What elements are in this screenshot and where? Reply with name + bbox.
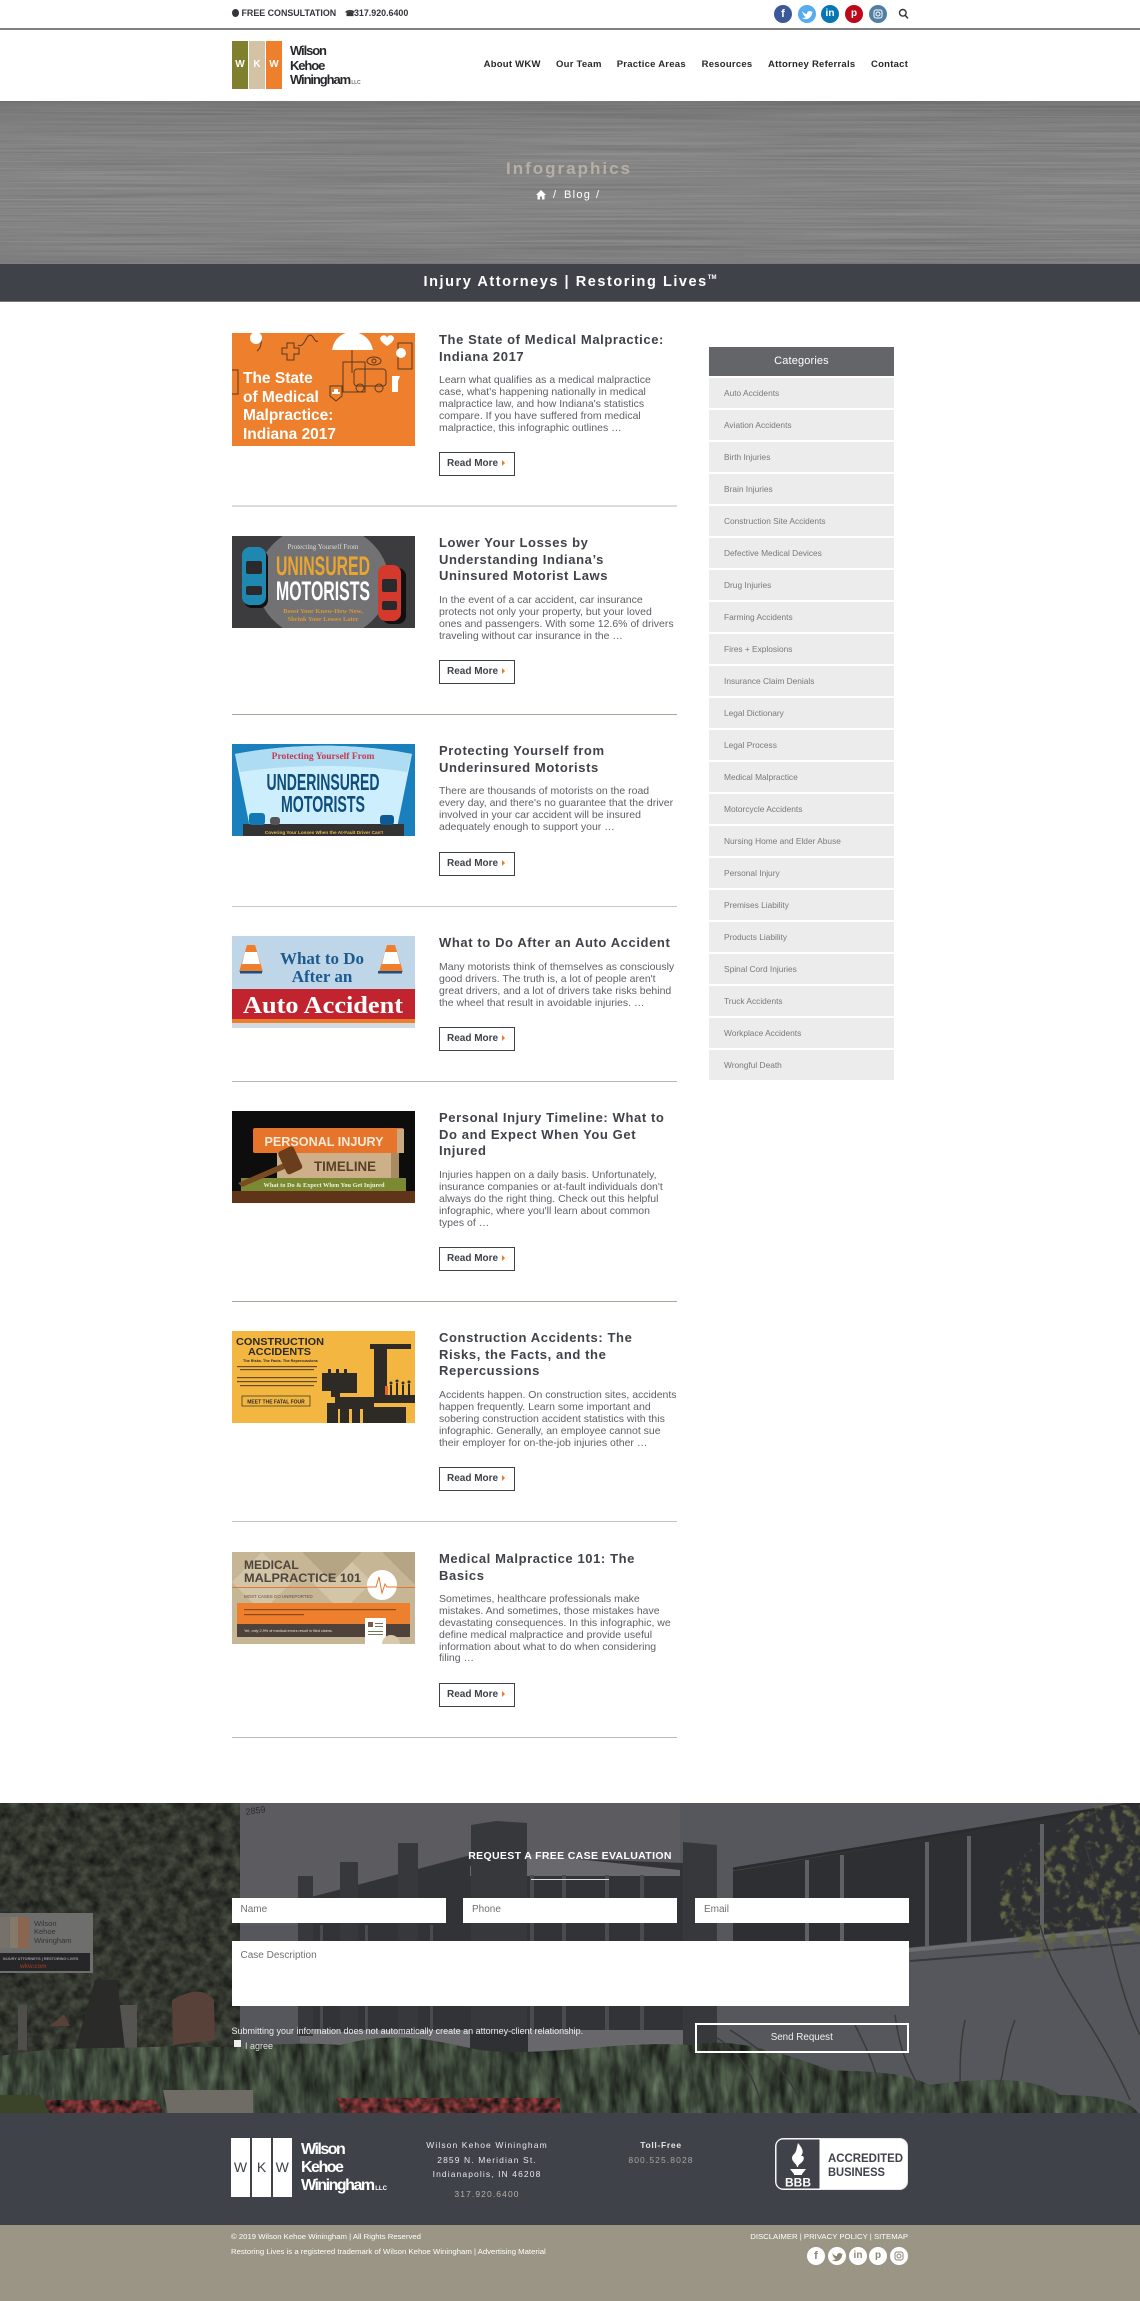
logo bar olive [232,41,248,89]
wall [0,1803,1140,2114]
article title: Uninsured Motorist Laws [439,568,608,583]
article excerpt: the wheel that result in avoidable injuries. … [439,997,644,1009]
article title [439,332,664,364]
social: instagram [869,5,887,23]
article title: Repercussions [439,1363,540,1378]
sidebar: categories [709,347,894,1080]
sidebar: categories: Birth Injuries [724,452,770,462]
social: linkedin: in [826,8,834,19]
article excerpt: types of … [439,1216,489,1228]
breadcrumb: / [553,189,557,201]
article excerpt: infographic. Generally, an employee cannot sue [439,1425,661,1437]
thumbnail: underinsured motorists: Protecting Yourself From [272,752,374,762]
read more button [439,1027,515,1051]
phone number: ☎ [345,9,355,18]
article 5 [232,1110,664,1271]
thumbnail: uninsured motorists [232,536,415,628]
roadside sign [0,1913,93,1973]
roadside sign: Kehoe [34,1927,56,1936]
footer legal bar [0,2225,1140,2301]
sidebar: categories: Wrongful Death [724,1060,782,1070]
breadcrumb: Blog [564,189,591,201]
article excerpt: malpractice law, and how Indiana's statistics [439,398,644,410]
nav links: Attorney Referrals [768,59,855,70]
thumbnail: what to do after an auto accident [232,936,415,1028]
article excerpt: their employer for on-the-job injuries other … [439,1436,647,1448]
form field: name: Name [240,1904,267,1915]
sidebar: categories: Insurance Claim Denials [724,676,814,686]
read more button [439,452,515,476]
read more button: Read More [447,1033,498,1044]
hero banner [0,101,1140,264]
logo bar olive: W [235,59,245,70]
shrubs [0,2037,1140,2120]
social: twitter [798,5,816,23]
thumbnail: construction accidents: CONSTRUCTION [236,1337,324,1348]
article title: Indiana 2017 [439,349,524,364]
read more button: Read More [447,666,498,677]
thumbnail: uninsured motorists: Shrink Your Losses Later [288,616,359,623]
lower left backdrop [172,1992,215,2045]
footer social icons: in [854,2250,862,2261]
article excerpt: infographic, where you'll learn about common [439,1205,650,1217]
top utility bar [0,0,1140,30]
logo bar orange: W [269,59,279,70]
social: linkedin [821,5,839,23]
footer social icons: p [875,2250,881,2261]
article 6 [232,1330,677,1491]
thumbnail: state of medical malpractice: of Medical [243,389,319,406]
article excerpt: protects not only your property, but your loved [439,606,652,618]
thumbnail: construction accidents [232,1331,415,1423]
breadcrumb: / [596,189,600,201]
article 7 [232,1551,671,1707]
sidebar: categories: Motorcycle Accidents [724,804,802,814]
article excerpt [439,1389,677,1448]
read more button [439,1467,515,1491]
read more button [439,852,515,876]
sidebar: categories: Truck Accidents [724,996,783,1006]
thumbnail: what to do after an auto accident: What to Do [280,949,364,968]
thumbnail: underinsured motorists [232,744,415,836]
social: facebook: f [781,8,785,20]
article excerpt: In the event of a car accident, car insurance [439,594,643,606]
categories heading [709,347,894,376]
right tree [997,1805,1140,1960]
nav links [484,59,908,70]
article excerpt: Many motorists think of themselves as consciously [439,961,674,973]
form field: case description [232,1941,908,2006]
article excerpt: Accidents happen. On construction sites, accidents [439,1389,677,1401]
BBB accredited badge: ACCREDITED [828,2153,903,2165]
logo wordmark [301,2141,387,2198]
nav links: Our Team [556,59,602,70]
article excerpt: case, what's happening nationally in medical [439,386,646,398]
article excerpt: Sometimes, healthcare professionals make [439,1593,640,1605]
read more button [439,660,515,684]
thumbnail: state of medical malpractice: Indiana 2017 [243,426,336,443]
form field: phone [463,1898,677,1923]
footer contact panel [0,2114,1140,2225]
address block: Indianapolis, IN 46208 [433,2169,541,2179]
form field: name [232,1898,446,1923]
phone number: 317.920.6400 [354,8,408,18]
thumbnail: personal injury timeline: What to Do & Expect When You Get Injured [264,1182,385,1189]
article title [439,1330,632,1378]
form field: email [695,1898,908,1923]
logo bars [231,2138,293,2197]
article excerpt [439,594,674,642]
logo bar orange [266,41,282,89]
article 1 [232,332,664,476]
tree foliage [0,1803,240,2060]
sidebar: categories: Medical Malpractice [724,772,798,782]
thumbnail: personal injury timeline [232,1111,415,1203]
thumbnail: personal injury timeline: PERSONAL INJURY [264,1134,384,1149]
thumbnail: medical malpractice 101: MOST CASES GO UNREPORTED [244,1594,313,1599]
central glazing [300,1855,683,2038]
thumbnail: what to do after an auto accident: Auto Accident [243,993,403,1019]
article excerpt: information about what to do when considering [439,1640,656,1652]
article excerpt: Learn what qualifies as a medical malpractice [439,374,651,386]
sidebar: categories: Products Liability [724,932,787,942]
article excerpt: every day, and there's no guarantee that the driver [439,797,673,809]
copyright: © 2019 Wilson Kehoe Winingham | All Rights Reserved [231,2232,421,2241]
article title: Basics [439,1568,485,1583]
logo wordmark: Winingham LLC [301,2177,387,2194]
article excerpt: compare. If you have suffered from medical [439,410,641,422]
toll-free block: 800.525.8028 [628,2155,694,2165]
upper wall [240,1803,680,1925]
article excerpt: mistakes. And sometimes, those mistakes have [439,1605,660,1617]
logo wordmark [290,43,361,87]
thumbnail: what to do after an auto accident: After an [292,967,353,986]
read more button [439,1683,515,1707]
sidebar: categories: Premises Liability [724,900,789,910]
nav links: Resources [702,59,752,70]
thumbnail: uninsured motorists: Boost Your Know-How Now, [283,608,363,615]
article excerpt: There are thousands of motorists on the road [439,785,649,797]
sidebar: categories: Construction Site Accidents [724,516,826,526]
breadcrumb [536,189,600,201]
brushed metal texture [0,101,1140,264]
send request button [695,2023,908,2053]
thumbnail: underinsured motorists: Covering Your Losses When the At-Fault Driver Can't [265,830,384,835]
disclaimer: Submitting your information does not automatically create an attorney-client relationship. [232,2026,583,2036]
right window band [733,1803,1140,1965]
address block [400,2138,574,2200]
article title [439,1551,635,1583]
case evaluation section [0,1803,1140,2114]
thumbnail: construction accidents: MEET THE FATAL FOUR [247,1400,305,1406]
article excerpt [439,961,674,1009]
legal links: DISCLAIMER | PRIVACY POLICY | SITEMAP [750,2232,908,2241]
roadside sign: Wilson [34,1919,57,1928]
address block: 2859 N. Meridian St. [437,2155,537,2165]
thumbnail: medical malpractice 101: MEDICAL [244,1558,299,1572]
read more button [439,1247,515,1271]
thumbnail: state of medical malpractice [232,333,415,446]
form field: email: Email [704,1904,729,1915]
logo bar tan: K [253,59,261,70]
article excerpt: involved in your car accident will be insured [439,809,641,821]
thumbnail: uninsured motorists: Protecting Yourself From [288,543,359,551]
article excerpt [439,374,651,434]
logo bar tan [249,41,265,89]
article 3 [232,743,673,876]
article excerpt: ones and passengers. With some 12.6% of drivers [439,618,674,630]
article excerpt: malpractice, this infographic outlines … [439,422,622,434]
BBB accredited badge: BBB [785,2178,811,2190]
sidebar: categories: Farming Accidents [724,612,793,622]
read more button: Read More [447,1253,498,1264]
article title [439,535,608,583]
sidebar: categories: Personal Injury [724,868,780,878]
logo wordmark: Kehoe [290,58,324,72]
roadside sign: wkw.com [19,1964,46,1970]
article excerpt: devastating consequences. In this infographic, we [439,1617,671,1629]
lawn stone [163,2090,253,2114]
icon: home [536,190,546,200]
form field: case description: Case Description [240,1950,317,1961]
article excerpt: Injuries happen on a daily basis. Unfortunately, [439,1169,657,1181]
roadside sign: Winingham [34,1936,72,1945]
read more button: Read More [447,1473,498,1484]
article excerpt: define medical malpractice and provide useful [439,1629,652,1641]
social: pinterest: p [851,8,857,19]
article title: Do and Expect When You Get [439,1127,636,1142]
article title: What to Do After an Auto Accident [439,935,670,950]
logo wordmark: Kehoe [301,2159,342,2176]
nav links: About WKW [484,59,541,70]
article title: Risks, the Facts, and the [439,1347,606,1362]
sidebar: categories: Auto Accidents [724,388,779,398]
page title: Infographics [506,159,632,178]
agree checkbox: I agree [245,2041,273,2051]
social: pinterest [845,5,863,23]
article title [439,743,605,775]
tagline band [0,264,1140,302]
trademark note: Restoring Lives is a registered trademark of Wilson Kehoe Winingham | Advertising Material [231,2247,546,2256]
free consultation link: FREE CONSULTATION [242,8,336,18]
sidebar: categories: Aviation Accidents [724,420,792,430]
flowers [45,2098,560,2114]
sidebar: categories: Brain Injuries [724,484,773,494]
sidebar: categories: Drug Injuries [724,580,771,590]
logo wordmark: Winingham LLC [290,72,361,87]
thumbnail: construction accidents: The Risks. The Facts. The Repercussions [243,1359,318,1363]
article title: Lower Your Losses by [439,535,589,550]
categories heading: Categories [774,355,829,367]
logo bars: W [234,2159,247,2175]
icon: search [898,8,908,19]
roadside sign: INJURY ATTORNEYS | RESTORING LIVES [3,1957,79,1961]
thumbnail: personal injury timeline: TIMELINE [314,1158,376,1174]
article title [439,1110,664,1158]
sidebar: categories: Workplace Accidents [724,1028,801,1038]
article excerpt: sobering construction accident statistics with this [439,1413,665,1425]
site header logo [232,41,361,89]
footer social icons: f [814,2250,818,2262]
logo wordmark: Wilson [290,43,326,58]
article title: Construction Accidents: The [439,1330,632,1345]
thumbnail: medical malpractice 101: MALPRACTICE 101 [244,1571,361,1585]
form field: phone: Phone [472,1904,501,1915]
nav links: Contact [871,59,908,70]
sidebar: categories: Defective Medical Devices [724,548,822,558]
logo bars: K [257,2159,266,2175]
heading rule [531,1879,609,1880]
main navigation [484,59,908,70]
article excerpt: traveling without car insurance in the … [439,630,623,642]
article title: Understanding Indiana’s [439,552,604,567]
article excerpt: happen frequently. Learn some important and [439,1401,651,1413]
article excerpt: insurance companies or at-fault individuals don't [439,1181,663,1193]
thumbnail: medical malpractice 101: Yet, only 2.9% of medical errors result in filed claims. [244,1629,333,1633]
agree checkbox [234,2039,284,2052]
article title: Underinsured Motorists [439,760,599,775]
article excerpt [439,1169,663,1228]
logo bars: W [276,2159,289,2175]
street number: 2859 [245,1804,266,1817]
read more button: Read More [447,1689,498,1700]
toll-free block [610,2138,712,2172]
nav links: Practice Areas [617,59,686,70]
social: facebook [774,5,792,23]
article 4 [232,935,674,1051]
tagline band: Injury Attorneys | Restoring LivesTM [424,274,716,290]
BBB accredited badge [775,2138,908,2190]
logo wordmark: Wilson [301,2141,344,2158]
article 2 [232,535,674,684]
footer social icons [807,2247,909,2265]
thumbnail: state of medical malpractice: The State [243,370,313,387]
building and landscaping photo [0,1803,1140,2114]
thumbnail: state of medical malpractice: Malpractice: [243,407,333,424]
toll-free block: Toll-Free [640,2140,682,2150]
article title: The State of Medical Malpractice: [439,332,664,347]
article excerpt [439,785,673,833]
article title: Medical Malpractice 101: The [439,1551,635,1566]
section heading: REQUEST A FREE CASE EVALUATION [468,1850,672,1862]
article excerpt: good drivers. The truth is, a lot of people aren't [439,973,656,985]
article title: Personal Injury Timeline: What to [439,1110,664,1125]
article title: Protecting Yourself from [439,743,605,758]
read more button: Read More [447,858,498,869]
thumbnail: medical malpractice 101 [232,1552,415,1644]
article title: Injured [439,1143,487,1158]
footer logo [231,2138,391,2197]
read more button: Read More [447,458,498,469]
sidebar: categories: Legal Process [724,740,777,750]
sidebar: categories: Fires + Explosions [724,644,792,654]
address block: Wilson Kehoe Winingham [426,2140,548,2150]
article excerpt: adequately enough to support your … [439,821,615,833]
category list [709,378,894,1080]
article excerpt: filing … [439,1652,474,1664]
pillars [298,1821,717,2060]
thumbnail: underinsured motorists: MOTORISTS [281,791,365,817]
BBB accredited badge: BUSINESS [828,2167,885,2179]
sidebar: categories: Spinal Cord Injuries [724,964,797,974]
address block: 317.920.6400 [454,2189,520,2199]
article excerpt: great drivers, and a lot of drivers take risks behind [439,985,671,997]
article excerpt [439,1593,671,1664]
sidebar: categories: Legal Dictionary [724,708,784,718]
send request button: Send Request [771,2032,833,2043]
sidebar: categories: Nursing Home and Elder Abuse [724,836,841,846]
base strip [0,2113,1140,2114]
thumbnail: construction accidents: ACCIDENTS [248,1347,311,1358]
article excerpt: always do the right thing. Check out this helpful [439,1193,658,1205]
